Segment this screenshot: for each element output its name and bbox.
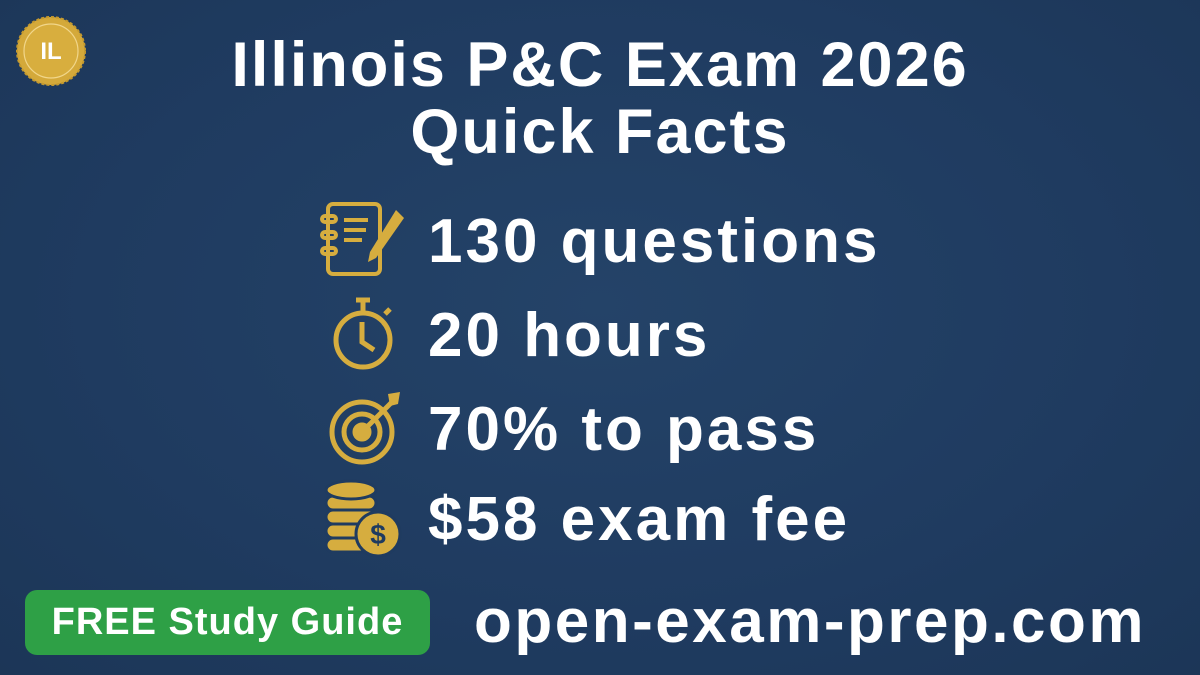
title: Illinois P&C Exam 2026 <box>231 30 969 100</box>
button: free study guide: FREE Study Guide <box>52 601 403 643</box>
text: 70% to pass <box>428 395 819 464</box>
url: open-exam-prep.com <box>474 587 1146 656</box>
title: Quick Facts <box>410 97 790 167</box>
icon: stopwatch <box>334 298 392 370</box>
fact: fee <box>328 482 850 554</box>
button: free study guide <box>25 590 430 655</box>
icon: coins <box>328 482 398 554</box>
fact: pass <box>330 392 819 464</box>
icon: target <box>330 392 400 464</box>
icon: notebook <box>320 202 404 276</box>
badge: IL <box>16 16 86 86</box>
title <box>231 30 969 167</box>
badge: IL: IL <box>40 38 62 65</box>
text: 20 hours <box>428 301 710 370</box>
fact: hours <box>334 298 710 370</box>
fact: questions <box>320 202 880 276</box>
text: 130 questions <box>428 207 880 276</box>
icon: coins: $ <box>370 519 386 550</box>
text: $58 exam fee <box>428 485 850 554</box>
